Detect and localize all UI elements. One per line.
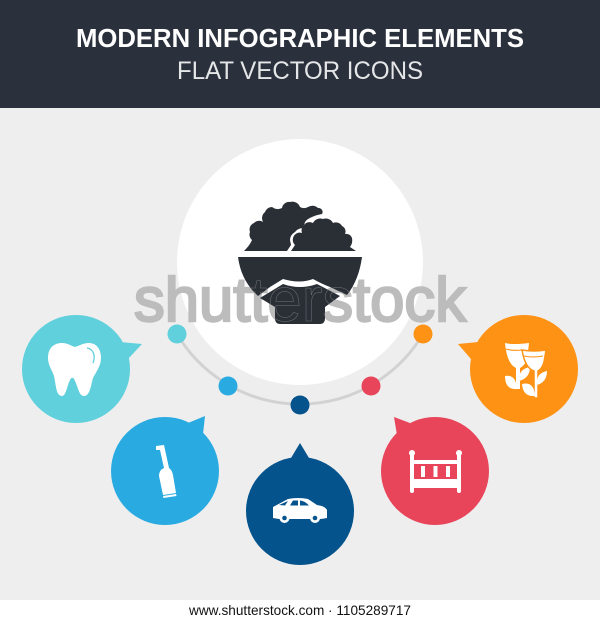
broccoli stem	[260, 284, 340, 324]
watermark outline over icon: shutterstock	[134, 266, 467, 335]
node: red	[362, 376, 380, 396]
left lettuce leaf	[244, 202, 323, 251]
icon: tooth	[48, 343, 101, 396]
icon: salad bowl	[238, 202, 362, 324]
right rose	[522, 350, 547, 398]
connector arc	[177, 334, 423, 404]
bubble: electric toothbrush	[111, 416, 219, 525]
icon: crib	[409, 450, 462, 493]
bowl	[238, 257, 362, 296]
watermark: shutterstock	[134, 266, 467, 335]
icon: electric toothbrush	[156, 445, 176, 498]
icon: car	[273, 498, 327, 523]
node: orange	[414, 324, 432, 344]
bubble: roses	[458, 315, 578, 423]
bubble: crib	[381, 417, 489, 525]
bubble: tooth	[22, 315, 142, 423]
bubble: car	[246, 443, 354, 565]
icon: roses	[505, 343, 547, 398]
subtitle: FLAT VECTOR ICONS	[177, 57, 423, 85]
header banner	[0, 0, 600, 108]
node: blue	[218, 376, 238, 396]
node: navy	[290, 396, 310, 414]
node: teal	[168, 324, 186, 344]
right lettuce leaf	[291, 218, 356, 251]
left rose	[505, 343, 530, 389]
central white circle	[177, 139, 423, 385]
footer	[0, 600, 600, 620]
title: MODERN INFOGRAPHIC ELEMENTS	[76, 25, 524, 53]
footer url and id: www.shutterstock.com · 1105289717	[188, 602, 411, 618]
